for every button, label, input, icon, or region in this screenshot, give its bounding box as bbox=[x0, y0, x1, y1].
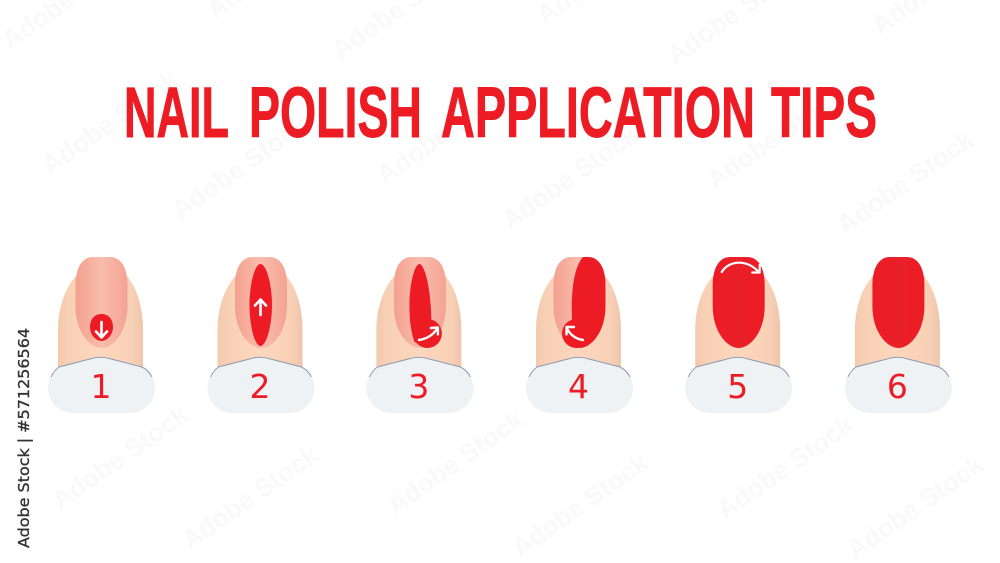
card bbox=[366, 357, 473, 413]
step 1: polish drop at nail base bbox=[48, 257, 155, 413]
watermark pattern: Adobe Stock bbox=[496, 119, 644, 235]
watermark pattern: Adobe Stock bbox=[381, 404, 529, 520]
watermark pattern: Adobe Stock bbox=[831, 124, 979, 240]
card bbox=[526, 357, 633, 413]
up arrow bbox=[255, 300, 266, 315]
card outline bbox=[51, 357, 152, 377]
finger bbox=[855, 276, 940, 375]
card bbox=[48, 357, 155, 413]
title: POLISH bbox=[249, 74, 422, 153]
title bbox=[124, 74, 877, 153]
watermark pattern: Adobe Stock bbox=[701, 79, 849, 195]
curved arrow bbox=[566, 327, 583, 340]
polish stroke and drop bbox=[409, 264, 442, 348]
card outline bbox=[848, 357, 949, 377]
bare nail bbox=[235, 257, 287, 348]
polished nail bbox=[872, 257, 924, 348]
card outline bbox=[369, 357, 470, 377]
number 6: 6 bbox=[887, 367, 908, 406]
card outline bbox=[529, 357, 630, 377]
title: NAIL bbox=[124, 74, 229, 153]
watermark pattern: Adobe Stock bbox=[371, 74, 519, 190]
polish covering right half bbox=[562, 257, 606, 348]
finger bbox=[58, 276, 143, 375]
watermark pattern: Adobe Stock bbox=[506, 447, 654, 563]
number 2: 2 bbox=[250, 367, 270, 406]
stock credit: Adobe Stock | #571256564 bbox=[15, 328, 33, 548]
polish drop bbox=[90, 314, 113, 341]
step 5: seal the tip bbox=[685, 257, 792, 413]
watermark pattern: Adobe Stock bbox=[711, 409, 859, 525]
card bbox=[845, 357, 952, 413]
step 2: centre stroke upward bbox=[208, 257, 314, 413]
curved arrow over tip bbox=[722, 263, 760, 272]
bare nail bbox=[554, 257, 606, 348]
curved arrow bbox=[419, 328, 438, 340]
finger bbox=[218, 276, 302, 375]
step 6: finished nail bbox=[845, 257, 952, 413]
polished nail bbox=[713, 257, 765, 348]
finger bbox=[536, 276, 621, 375]
watermark pattern: Adobe Stock bbox=[36, 64, 184, 180]
title: TIPS bbox=[771, 74, 877, 153]
watermark pattern: Adobe Stock bbox=[841, 449, 989, 563]
step 3: sweep to the right side bbox=[366, 257, 473, 413]
number 3: 3 bbox=[408, 367, 429, 406]
down arrow bbox=[96, 322, 107, 338]
number 1: 1 bbox=[90, 367, 112, 406]
bare nail bbox=[394, 257, 446, 348]
card outline bbox=[210, 357, 312, 377]
watermark pattern: Adobe Stock bbox=[46, 399, 194, 515]
title: APPLICATION bbox=[441, 74, 755, 153]
step 4: sweep to the left side bbox=[526, 257, 633, 413]
watermark pattern: Adobe Stock bbox=[166, 109, 314, 225]
bare nail bbox=[76, 257, 128, 348]
number 5: 5 bbox=[727, 367, 748, 406]
finger bbox=[695, 276, 780, 375]
card outline bbox=[688, 357, 789, 377]
finger bbox=[376, 276, 461, 375]
centre polish stroke bbox=[250, 264, 272, 346]
card bbox=[208, 357, 314, 413]
watermark pattern: Adobe Stock bbox=[176, 439, 324, 555]
card bbox=[685, 357, 792, 413]
number 4: 4 bbox=[568, 367, 589, 406]
